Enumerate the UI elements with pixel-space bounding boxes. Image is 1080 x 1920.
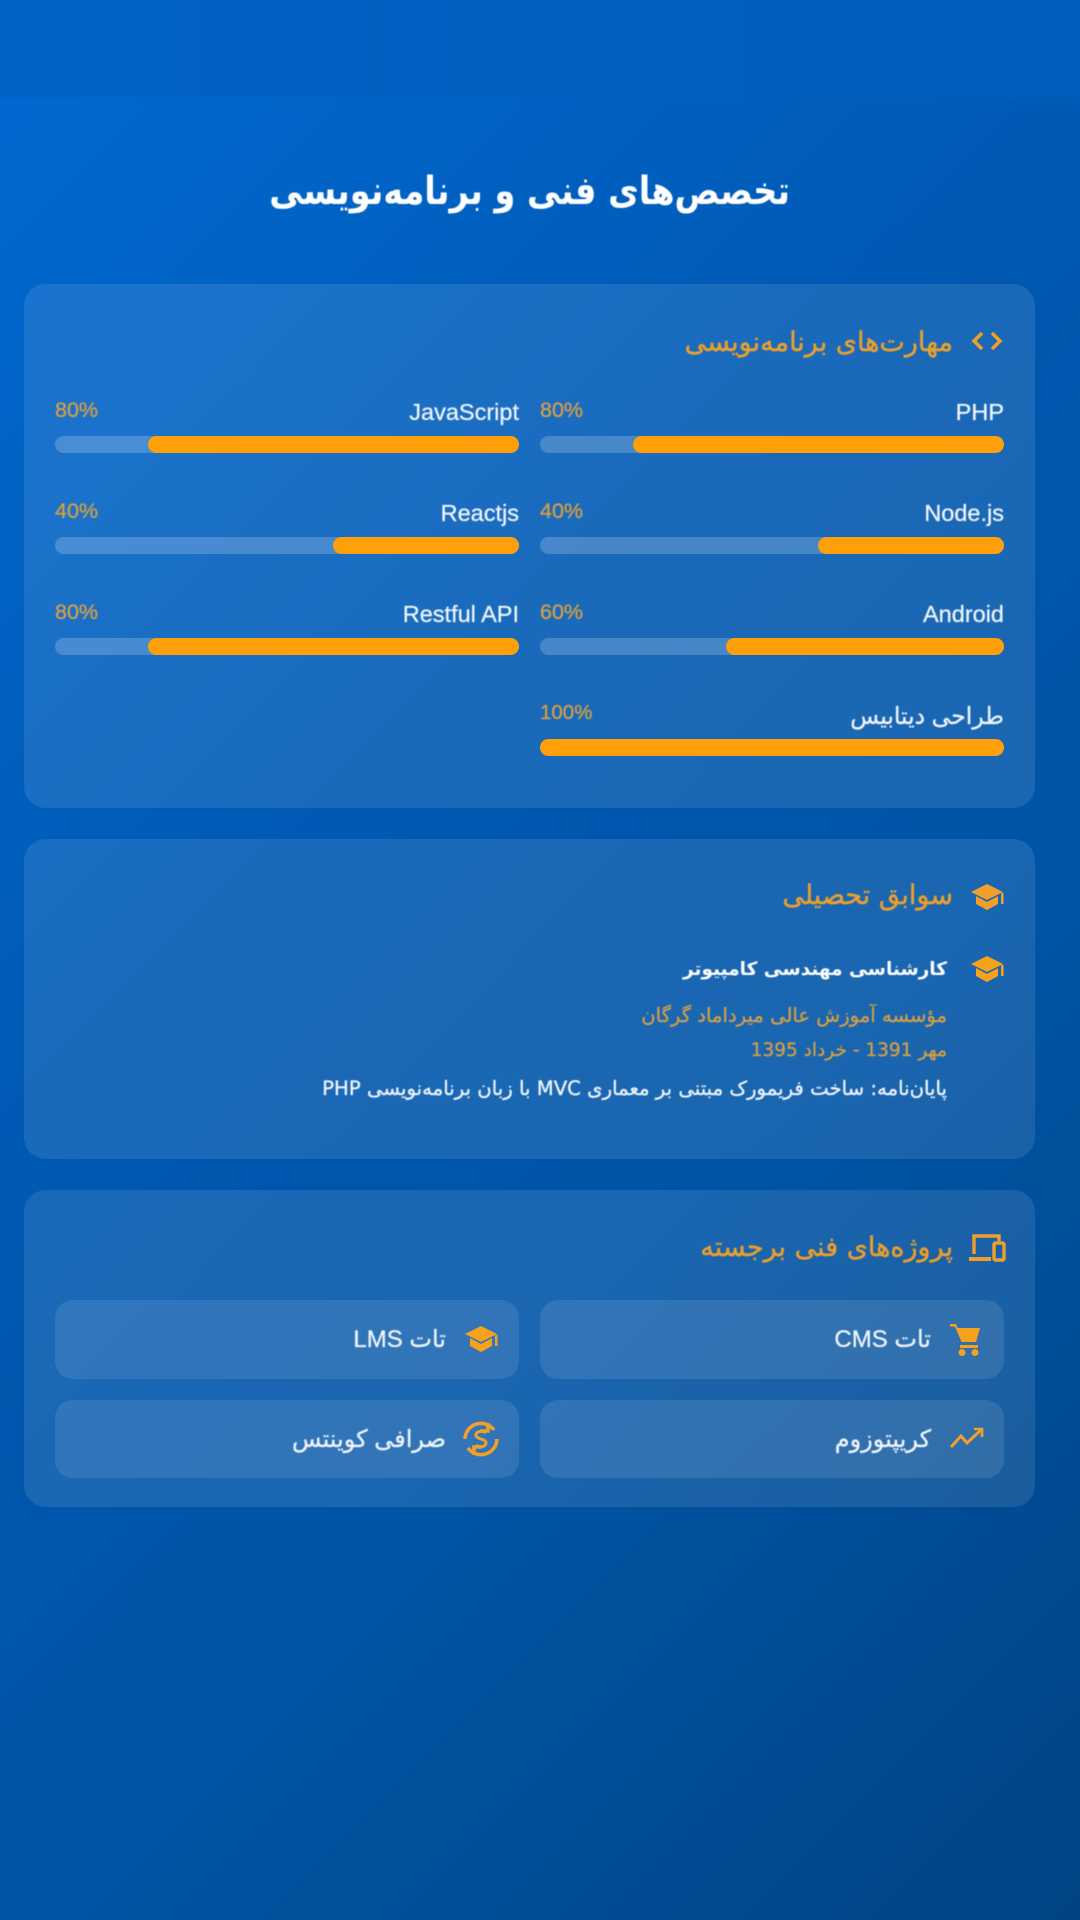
skill: Android bbox=[540, 600, 1004, 655]
thesis: پایان‌نامه: ساخت فریمورک مبتنی بر معماری MVC با زبان برنامه‌نویسی PHP bbox=[322, 1077, 947, 1100]
institute: مؤسسه آموزش عالی میرداماد گرگان bbox=[641, 1004, 947, 1027]
skill: Node.js: Node.js bbox=[924, 500, 1004, 526]
skill: JavaScript: JavaScript bbox=[409, 399, 519, 425]
skill: Node.js bbox=[540, 499, 1004, 554]
skill: Android: 60% bbox=[540, 600, 583, 624]
skill: Restful API: Restful API bbox=[403, 601, 519, 627]
skill: Node.js: 40% bbox=[540, 499, 583, 523]
project card: Tat LMS bbox=[55, 1300, 519, 1379]
skill: Restful API bbox=[55, 600, 519, 655]
panel: projects bbox=[24, 1190, 1035, 1507]
skill: Reactjs: Reactjs bbox=[441, 500, 519, 526]
heading: education: سوابق تحصیلی bbox=[782, 880, 953, 911]
project card: Coinex exchange: صرافی کوینتس bbox=[292, 1426, 446, 1453]
project card: Tat LMS: تات LMS bbox=[353, 1326, 446, 1353]
skill: database design: 100% bbox=[540, 701, 592, 724]
project card: Cryptozoom bbox=[540, 1400, 1004, 1478]
skill: JavaScript: 80% bbox=[55, 398, 98, 422]
skill: Restful API: 80% bbox=[55, 600, 98, 624]
heading: programming skills: مهارت‌های برنامه‌نویسی bbox=[685, 327, 953, 358]
skill: database design bbox=[540, 701, 1004, 756]
top header band bbox=[0, 0, 1080, 97]
skill: database design: طراحی دیتابیس bbox=[850, 703, 1004, 729]
project card: Cryptozoom: کریپتوزوم bbox=[835, 1426, 931, 1453]
skill: Android: Android bbox=[923, 601, 1004, 627]
project card: Tat CMS bbox=[540, 1300, 1004, 1379]
degree title: کارشناسی مهندسی کامپیوتر bbox=[683, 959, 947, 980]
panel: education bbox=[24, 839, 1035, 1159]
icon: graduation cap bbox=[971, 884, 1004, 910]
skill: Reactjs bbox=[54, 499, 520, 554]
project card: Tat CMS: تات CMS bbox=[834, 1326, 931, 1353]
project card: Coinex exchange bbox=[55, 1400, 519, 1478]
dates: مهر 1391 - خرداد 1395 bbox=[751, 1040, 947, 1061]
skill: JavaScript bbox=[55, 398, 520, 453]
skill: PHP: 80% bbox=[540, 398, 583, 422]
skill: PHP: PHP bbox=[956, 399, 1004, 425]
panel: programming skills bbox=[24, 284, 1035, 808]
icon: devices bbox=[969, 1234, 1006, 1262]
title: تخصص‌های فنی و برنامه‌نویسی bbox=[269, 169, 790, 214]
heading: projects: پروژه‌های فنی برجسته bbox=[700, 1232, 953, 1263]
icon: graduation cap bbox=[971, 956, 1004, 982]
icon: code bbox=[972, 332, 1002, 350]
skill: PHP bbox=[540, 398, 1004, 453]
skill: Reactjs: 40% bbox=[55, 499, 98, 523]
